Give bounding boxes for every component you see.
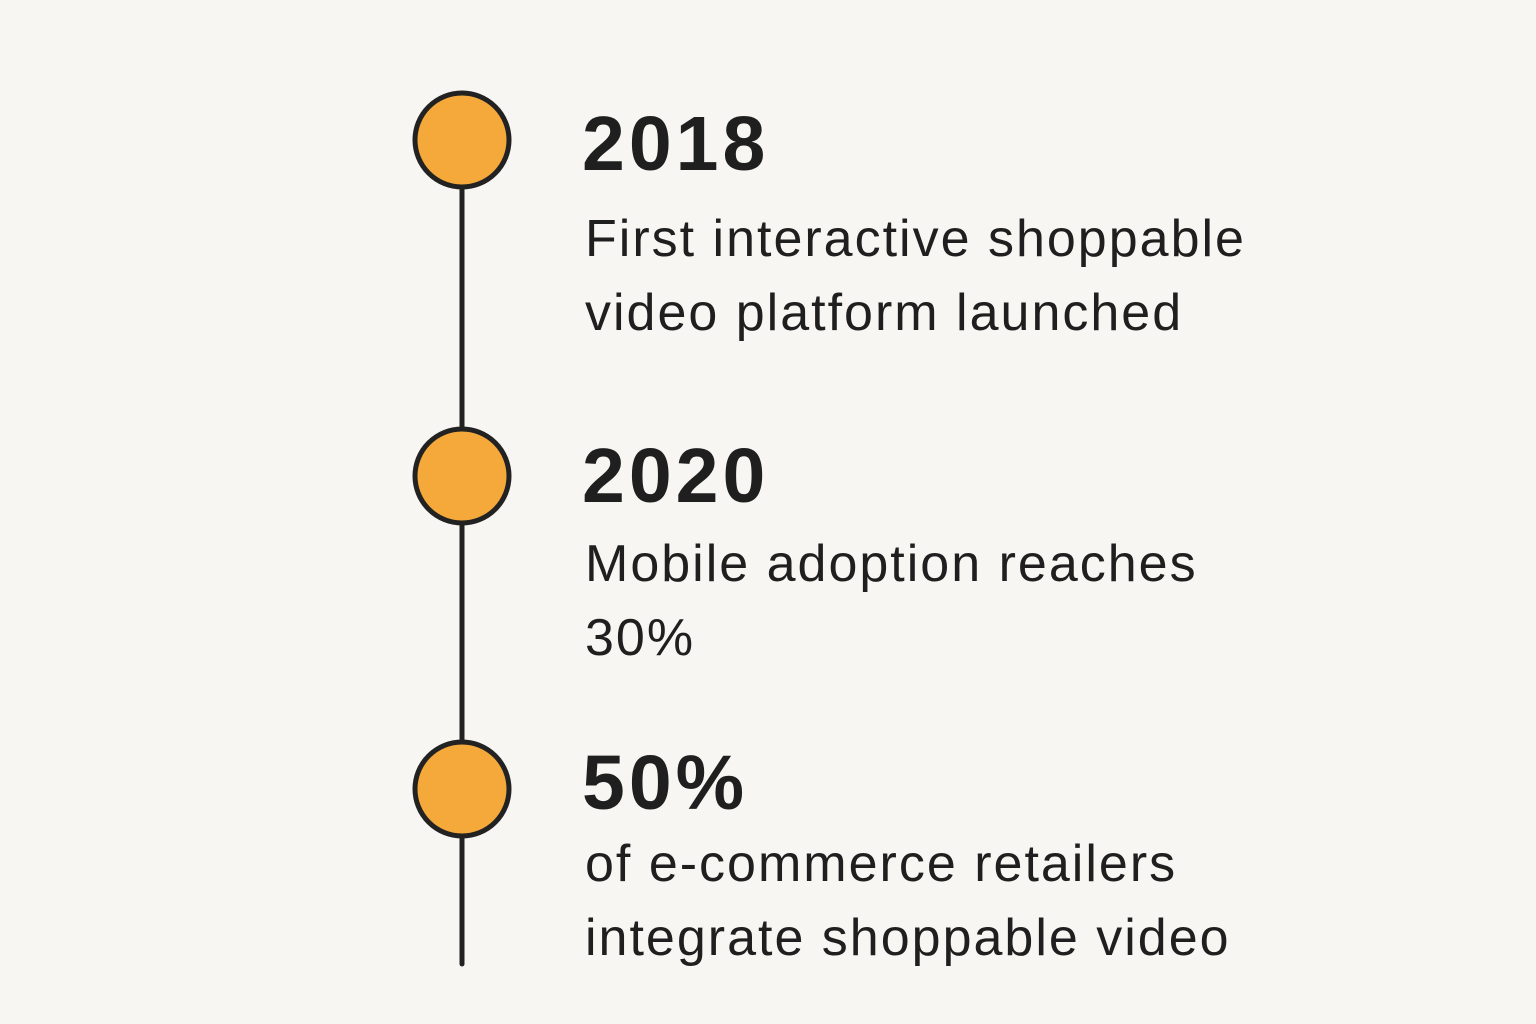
text: 2020 description: Mobile adoption reaches — [585, 535, 1198, 593]
text: 2018 description: video platform launched — [585, 284, 1183, 342]
text: 2018 description — [585, 210, 1246, 342]
text: 50% description — [585, 835, 1231, 967]
heading: 2018: 2018 — [582, 101, 769, 187]
text: 2020 description: 30% — [585, 609, 695, 667]
marker: 2020 — [415, 429, 509, 523]
timeline line — [460, 185, 464, 964]
text: 2018 description: First interactive shoppable — [585, 210, 1246, 268]
text: 2020 description — [585, 535, 1198, 667]
text: 50% description: integrate shoppable video — [585, 909, 1231, 967]
marker: 2018 — [415, 93, 509, 187]
text: 50% description: of e-commerce retailers — [585, 835, 1177, 893]
heading: 2020: 2020 — [582, 433, 769, 519]
marker: 50% — [415, 742, 509, 836]
heading: 50%: 50% — [582, 740, 748, 826]
